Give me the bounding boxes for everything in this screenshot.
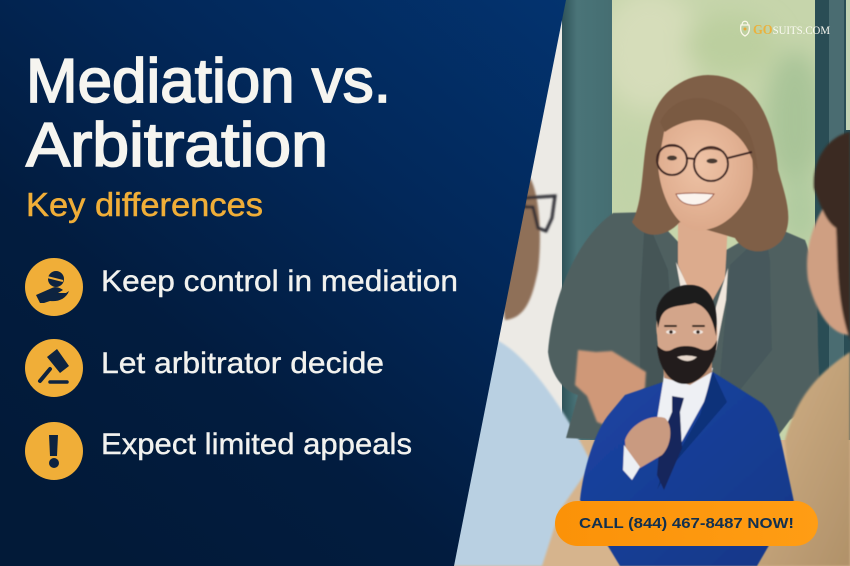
- item: let arbitrator decide: [25, 339, 384, 397]
- icon: exclamation mark: [25, 422, 83, 480]
- label: Let arbitrator decide: [101, 347, 384, 380]
- neck: [678, 222, 728, 305]
- beard: [657, 340, 717, 384]
- blazer: [548, 212, 820, 440]
- neck: [662, 350, 712, 385]
- hair: [656, 285, 717, 336]
- navy text panel: [0, 0, 566, 566]
- office photo background: [440, 0, 850, 566]
- hair: [632, 75, 788, 251]
- person: man from behind at left: [440, 178, 592, 566]
- item: expect limited appeals: [25, 422, 412, 480]
- eyes: [666, 330, 703, 334]
- icon: padlock shield: [741, 21, 749, 36]
- call to action button: [555, 501, 818, 546]
- face: [658, 111, 753, 230]
- icon: gavel: [25, 339, 83, 397]
- hand at tie: [625, 417, 670, 468]
- logo: GoSuits.com: [741, 21, 830, 38]
- item: keep control in mediation: [25, 258, 458, 316]
- icon: hand holding coin: [25, 258, 83, 316]
- table: [440, 440, 850, 566]
- person: attorney in blue suit: [580, 285, 794, 566]
- title: [26, 47, 391, 180]
- handshake: [575, 350, 646, 428]
- title: Mediation vs.: [26, 47, 391, 116]
- person: woman in tan blazer at right: [755, 132, 850, 566]
- lapel: [657, 372, 727, 490]
- call to action button: CALL (844) 467-8487 NOW!: [579, 515, 794, 532]
- label: Expect limited appeals: [101, 428, 412, 461]
- wordmark: GOSUITS.COM: [753, 23, 830, 38]
- glasses: [657, 145, 752, 181]
- smile: [676, 193, 714, 205]
- label: Keep control in mediation: [101, 265, 458, 298]
- person: smiling woman in grey blazer: [548, 75, 820, 440]
- shirt: [656, 360, 713, 470]
- face: [656, 296, 717, 384]
- title: Arbitration: [26, 111, 328, 180]
- blouse: [676, 262, 728, 350]
- jacket: [580, 372, 794, 566]
- tie: [657, 396, 684, 490]
- subtitle: Key differences: [26, 186, 263, 223]
- brows and eyes: [662, 146, 724, 152]
